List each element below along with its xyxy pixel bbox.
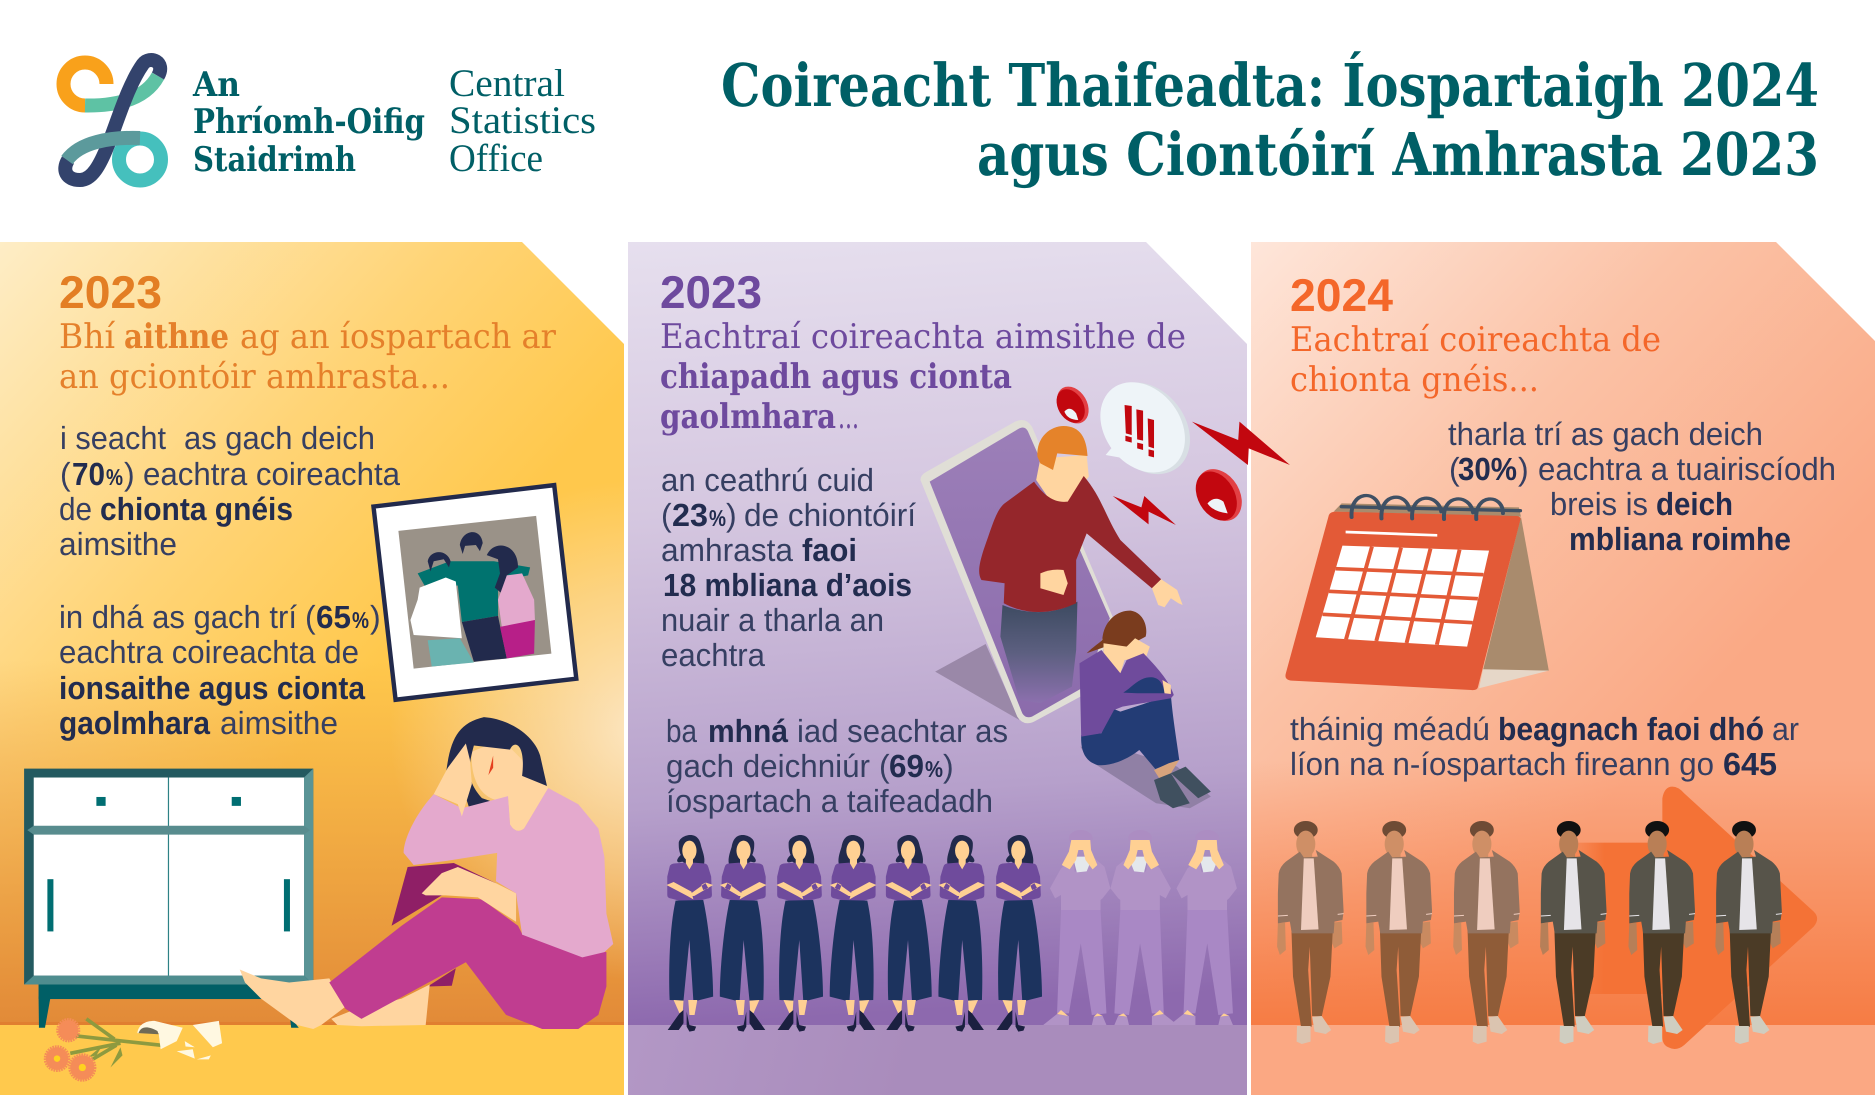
text block: 65 percent: 65 [316, 599, 351, 635]
fallen flowers and broken vase [46, 1019, 222, 1080]
logo text: Irish name: Phríomh-Oifig [193, 102, 425, 142]
text block: 65 percent: gaolmhara [59, 705, 210, 741]
text block: 69 percent: ) [943, 748, 954, 784]
text block: 30 percent: 30% [1458, 451, 1517, 487]
panel: 2024 sexual offences [1251, 242, 1875, 1095]
text block: 69 percent: mhná [708, 713, 788, 749]
text block: 65 percent: ) [370, 599, 381, 635]
cabinet [24, 769, 313, 1028]
text block: 23 percent: 23 [672, 497, 708, 533]
text block: 70 percent: ) [124, 456, 135, 492]
arrow: increase [1557, 787, 1817, 1049]
text block: 69 percent [666, 713, 1008, 819]
heading: victim knew suspect: Bhí [59, 317, 116, 357]
text block: 30 percent: eachtra a tuairiscíodh [1538, 451, 1836, 487]
text block: 70 percent: as gach deich [184, 420, 375, 456]
logo text: English name: Central [449, 62, 565, 105]
text block: 69 percent: 69 [889, 748, 924, 784]
text block: 69 percent: % [925, 756, 943, 782]
text block: 23 percent: ( [661, 497, 672, 533]
text block: male victims nearly doubled: líon na n-íospartach fireann go [1290, 746, 1714, 782]
text block: 70 percent [59, 420, 400, 562]
text block: 69 percent: íospartach a taifeadadh [666, 783, 993, 819]
text block: 23 percent: de chiontóirí [744, 497, 916, 533]
icon: logo knot mark [64, 60, 161, 180]
panel background purple [628, 242, 1247, 1095]
year 2024: 2024 [1290, 269, 1393, 321]
logo text: Irish name: Staidrimh [193, 140, 356, 180]
text block: 30 percent: tharla trí as gach deich [1448, 416, 1763, 452]
text block: 70 percent: eachtra coireachta [143, 456, 400, 492]
logo text: English name: Statistics [449, 99, 596, 142]
text block: 69 percent: ( [879, 748, 890, 784]
heading: coercive control incidents: Eachtraí coireachta aimsithe de [660, 317, 1186, 357]
text block: 65 percent [59, 599, 381, 741]
title [721, 51, 1819, 189]
heading: victim knew suspect: an gciontóir amhrasta... [59, 357, 450, 397]
text block: 23 percent [661, 462, 916, 673]
text block: 65 percent: eachtra coireachta de [59, 634, 359, 670]
text block: 23 percent: ) [726, 497, 737, 533]
text block: 30 percent: deich [1656, 486, 1733, 522]
text block: male victims nearly doubled: 645 [1723, 746, 1777, 782]
panel: 2023 coercive control [628, 242, 1250, 1095]
text block: 70 percent: de [59, 491, 92, 527]
heading: victim knew suspect [59, 317, 557, 397]
text block: 69 percent: gach deichniúr [666, 748, 870, 784]
heading: victim knew suspect: ag an íospartach ar [240, 317, 557, 357]
icon: speech bubble with exclamation marks [1085, 373, 1205, 484]
logo text: English name [449, 62, 596, 180]
logo: Central Statistics Office [64, 60, 596, 180]
text block: 23 percent: 18 mbliana d’aois [663, 567, 912, 603]
text block: 23 percent: % [709, 505, 726, 531]
logo text: Irish name [192, 65, 425, 180]
text block: 23 percent: eachtra [661, 637, 765, 673]
pictogram: seven women out of ten [666, 835, 1042, 1032]
text block: 70 percent: % [106, 464, 123, 490]
pictogram: three solid men [1540, 821, 1782, 1044]
text block: 70 percent: ( [60, 456, 71, 492]
text block: 30 percent [1448, 416, 1836, 557]
year 2023: 2023 [59, 266, 162, 318]
text block: 70 percent: aimsithe [59, 526, 177, 562]
icon: desk calendar [1285, 496, 1549, 690]
text block: 23 percent: an ceathrú cuid [661, 462, 874, 498]
text block: male victims nearly doubled: ar [1772, 711, 1799, 747]
pictogram: three faded men [1277, 821, 1520, 1044]
text block: 65 percent: in dhá as gach trí [59, 599, 297, 635]
text block: 65 percent: aimsithe [220, 705, 338, 741]
text block: 65 percent: ( [305, 599, 316, 635]
heading: sexual offence incidents: Eachtraí coireachta de [1290, 320, 1661, 360]
icons: lightning bolts [1113, 422, 1290, 525]
panel background orange [1251, 242, 1875, 1095]
text block: 65 percent: % [352, 607, 369, 633]
text block: 23 percent: amhrasta [661, 532, 793, 568]
year 2023: 2023 [660, 266, 762, 318]
text block: 30 percent: mbliana roimhe [1569, 521, 1791, 557]
panel background yellow [0, 242, 624, 1095]
text block: 70 percent: 70 [72, 456, 105, 492]
text block: 69 percent: iad seachtar as [797, 713, 1008, 749]
text block: 23 percent: nuair a tharla an [661, 602, 884, 638]
icons: red emotion blobs [1051, 383, 1250, 525]
seated woman [240, 717, 613, 1029]
heading: victim knew suspect: aithne [124, 317, 229, 357]
heading: coercive control incidents: gaolmhara [660, 397, 836, 437]
logo text: Irish name: An [192, 65, 240, 105]
panel: 2023 victim knew suspect [0, 242, 624, 1095]
text block: male victims nearly doubled: tháinig méadú [1290, 711, 1490, 747]
heading: coercive control incidents: ... [838, 397, 859, 437]
framed family photo [373, 485, 576, 700]
text block: 30 percent: ) [1518, 451, 1529, 487]
heading: coercive control incidents [660, 317, 1186, 437]
text block: 23 percent: faoi [802, 532, 857, 568]
heading: sexual offence incidents: chionta gnéis... [1290, 360, 1539, 400]
text block: 30 percent: ( [1449, 451, 1460, 487]
text block: 65 percent: ionsaithe agus cionta [59, 670, 365, 706]
text block: 70 percent: chionta gnéis [100, 491, 293, 527]
text block: 70 percent: i seacht [60, 420, 166, 456]
text block: male victims nearly doubled [1290, 711, 1799, 782]
text block: male victims nearly doubled: beagnach faoi dhó [1498, 711, 1764, 747]
logo text: English name: Office [449, 137, 543, 180]
pictogram: three faded men [1043, 830, 1237, 1025]
heading: coercive control incidents: chiapadh agus cionta [660, 357, 1012, 397]
illustration: man emerging from phone over seated woman [920, 420, 1211, 808]
heading: sexual offence incidents [1290, 320, 1661, 400]
text block: 30 percent: breis is [1550, 486, 1648, 522]
text block: 69 percent: ba [666, 713, 697, 749]
